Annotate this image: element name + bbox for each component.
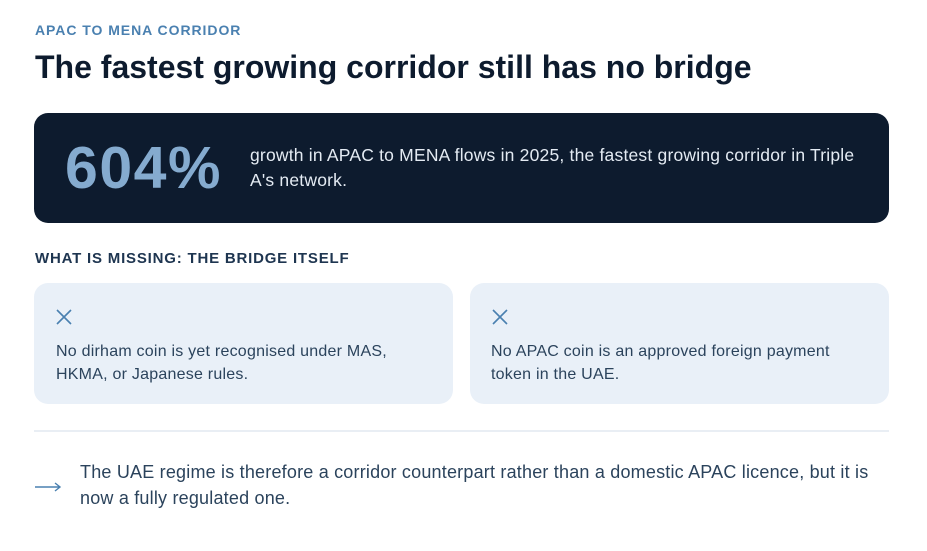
card text: No dirham coin is yet recognised under MAS, [56, 343, 387, 360]
icon: cross [492, 309, 508, 325]
card: no dirham coin [34, 283, 453, 404]
icon: arrow [35, 482, 61, 492]
stat description [250, 145, 854, 190]
icon: cross [56, 309, 72, 325]
conclusion text [80, 462, 868, 508]
section heading: WHAT IS MISSING: THE BRIDGE ITSELF [35, 250, 349, 267]
kicker: APAC TO MENA CORRIDOR [35, 22, 241, 38]
card text [491, 343, 830, 383]
card: no APAC coin [470, 283, 889, 404]
stat banner [34, 113, 889, 223]
card text: No APAC coin is an approved foreign payment [491, 343, 830, 360]
card text: token in the UAE. [491, 366, 619, 383]
conclusion text: The UAE regime is therefore a corridor counterpart rather than a domestic APAC licence, but it is [80, 462, 868, 482]
conclusion text: now a fully regulated one. [80, 488, 290, 508]
card text [56, 343, 387, 383]
stat description: A's network. [250, 170, 347, 190]
card text: HKMA, or Japanese rules. [56, 366, 248, 383]
stat value: 604% [65, 135, 222, 201]
title: The fastest growing corridor still has no bridge [35, 49, 752, 85]
stat description: growth in APAC to MENA flows in 2025, the fastest growing corridor in Triple [250, 145, 854, 165]
